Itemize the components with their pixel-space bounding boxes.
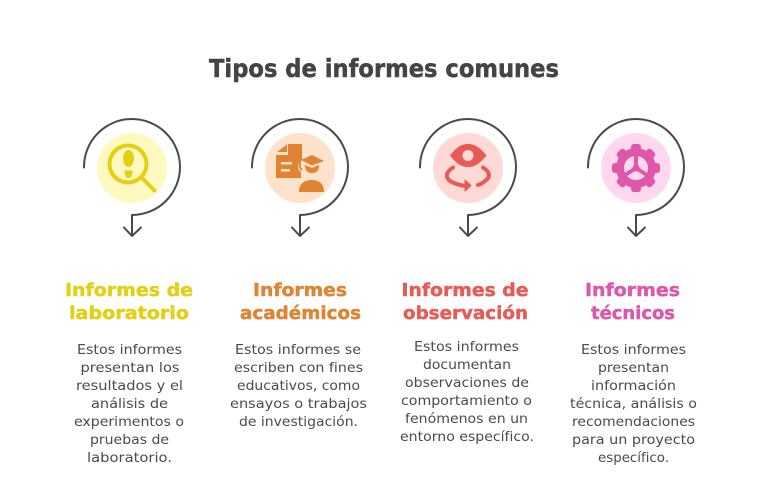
icon: gear [601,133,671,203]
panel: informes de observación [400,119,534,445]
heading: laboratorio: laboratorio [69,303,189,324]
heading: laboratorio: Informes de [65,280,193,301]
title: Tipos de informes comunes [209,54,559,83]
text: técnicos description: información [591,378,676,394]
text: laboratorio description: análisis de [91,396,168,412]
text: laboratorio description: experimentos o [74,414,184,430]
arrow: circular arrow observación [420,119,516,236]
panel: informes de laboratorio [65,119,193,466]
text: académicos description: de investigación. [239,414,358,430]
text: observación description: entorno específico. [400,429,534,445]
text: laboratorio description: pruebas de [90,432,169,448]
arrow: circular arrow laboratorio [84,119,180,236]
text: técnicos description [570,342,697,466]
text: técnicos description: recomendaciones [572,414,695,430]
text: académicos description: Estos informes se [235,342,361,358]
icon: eye with rotating arrows [433,133,503,203]
arrow: circular arrow académicos [252,119,348,236]
heading: académicos: académicos [240,303,361,324]
text: técnicos description: Estos informes [581,342,686,358]
text: observación description: Estos informes [414,339,519,355]
text: académicos description: escriben con fines [234,360,363,376]
panel: informes académicos [230,119,367,430]
text: laboratorio description: laboratorio. [87,450,172,466]
text: académicos description [230,342,367,430]
heading: técnicos: técnicos [591,303,675,324]
text: observación description: fenómenos en un [405,411,528,427]
heading: técnicos: Informes [585,280,680,301]
text: académicos description: ensayos o trabajos [230,396,367,412]
text: técnicos description: presentan [598,360,669,376]
text: técnicos description: específico. [598,450,669,466]
heading: observación [402,280,528,324]
panel: informes técnicos [570,119,697,466]
text: técnicos description: técnica, análisis o [570,396,697,412]
icon: document and graduate [265,133,335,203]
text: técnicos description: para un proyecto [572,432,695,448]
text: laboratorio description: resultados y el [76,378,183,394]
heading: técnicos [585,280,680,324]
text: laboratorio description: Estos informes [77,342,182,358]
text: observación description [400,339,534,445]
heading: observación: Informes de [402,280,528,301]
heading: observación: observación [403,303,528,324]
text: observación description: observaciones de [405,375,529,391]
text: observación description: comportamiento o [401,393,532,409]
text: laboratorio description [74,342,184,466]
icon: magnifier with footprint [97,133,167,203]
text: observación description: documentan [423,357,511,373]
heading: académicos [240,280,361,324]
arrow: circular arrow técnicos [588,119,684,236]
text: laboratorio description: presentan los [80,360,180,376]
heading: laboratorio [65,280,193,324]
text: académicos description: educativos, como [237,378,360,394]
heading: académicos: Informes [253,280,347,301]
